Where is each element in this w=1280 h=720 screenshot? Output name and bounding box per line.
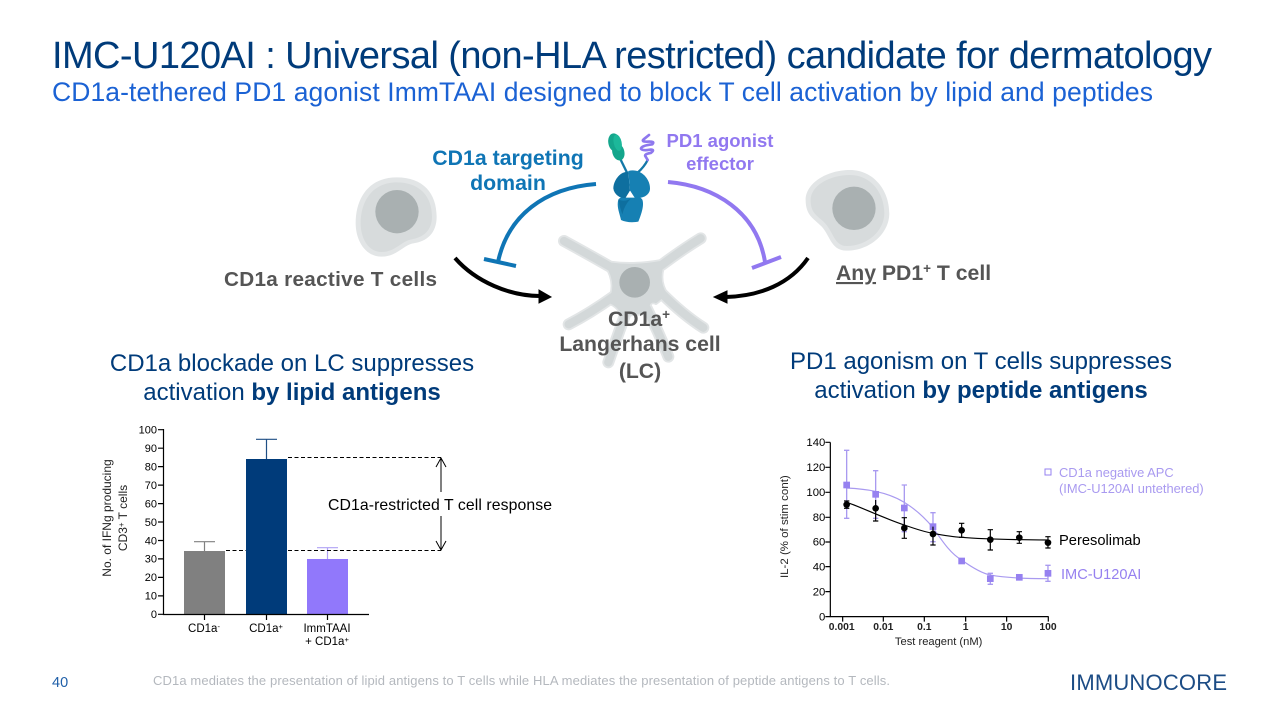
x labels: CD1a [249, 623, 279, 635]
legend: CD1a negative APC: (IMC-U120AI untethered) [1059, 481, 1204, 496]
label: CD1a+ Langerhans cell (LC): + [662, 307, 670, 322]
y tick labels: 60 [145, 498, 157, 510]
x labels [188, 622, 351, 648]
y tick labels: 50 [145, 517, 157, 529]
dashed reference lines [226, 458, 441, 550]
bar chart: IFNg producing T cells [100, 424, 552, 648]
x tick labels: 0.001 [829, 622, 855, 633]
y tick labels: 40 [813, 561, 825, 573]
heading: lipid antigens: CD1a blockade on LC suppresses [110, 350, 474, 377]
x labels: CD1a [188, 623, 217, 635]
y tick labels [806, 437, 825, 623]
title: IMC-U120AI : Universal (non-HLA restricted) candidate for dermatology [52, 35, 1212, 77]
legend: CD1a negative APC [1045, 465, 1204, 496]
y axis title: No. of IFNg producing [100, 459, 114, 577]
label: Any PD1+ T cell: Any PD1 [836, 262, 923, 285]
y tick labels: 30 [145, 554, 157, 566]
y axis title: + [117, 522, 126, 527]
page number: 40 [52, 675, 68, 691]
logo: Immunocore: IMMUNOCORE [1070, 670, 1227, 695]
x labels: + [279, 622, 284, 631]
x labels: ImmTAAI [303, 623, 351, 635]
subtitle: CD1a-tethered PD1 agonist ImmTAAI designed to block T cell activation by lipid and peptides [52, 77, 1153, 107]
icon: PD1 positive T cell [806, 170, 889, 251]
y tick labels: 40 [145, 535, 157, 547]
y tick labels: 20 [145, 572, 157, 584]
inhibition line: PD1 agonist [668, 182, 781, 268]
footnote: CD1a mediates the presentation of lipid antigens to T cells while HLA mediates the presentation of peptide antigens to T cells. [153, 673, 890, 688]
error bars [194, 439, 338, 559]
y tick labels: 80 [813, 512, 825, 524]
panel: mechanism diagram [224, 130, 991, 383]
legend: IMC-U120AI: IMC-U120AI [1061, 567, 1141, 583]
legend: CD1a negative APC: CD1a negative APC [1059, 465, 1174, 480]
y axis title: T cells [116, 485, 130, 522]
y tick labels: 70 [145, 480, 157, 492]
x labels: + CD1a [305, 635, 349, 648]
label: PD1 agonist effector: PD1 agonist [667, 130, 773, 151]
y tick labels: 0 [151, 609, 157, 621]
label: CD1a+ Langerhans cell (LC): CD1a [608, 307, 670, 331]
y axis title: CD3 [116, 485, 130, 551]
x tick labels: 1 [963, 622, 969, 633]
line chart: IL-2 dose response: IL-2 (% of stim cont) [779, 475, 791, 578]
x tick labels: 0.01 [873, 622, 894, 633]
heading: peptide antigens: activation by peptide antigens [814, 377, 1148, 404]
heading: peptide antigens: PD1 agonism on T cells suppresses [790, 348, 1172, 375]
label: CD1a+ Langerhans cell (LC): Langerhans cell [559, 333, 721, 356]
arrow: PD1 T cell to LC [714, 258, 808, 303]
series: IMC-U120AI [843, 450, 1051, 584]
y tick labels: 120 [806, 462, 825, 474]
x tick labels [829, 622, 1057, 633]
label: CD1a targeting domain: domain [470, 171, 546, 195]
arrow: reactive T cell to LC [455, 258, 551, 303]
callout: T cell response: CD1a-restricted T cell response [328, 497, 552, 514]
y tick labels: 0 [819, 611, 825, 623]
label: Any PD1+ T cell: T cell [931, 262, 991, 285]
icon: Langerhans cell [564, 238, 703, 362]
x labels: - [217, 622, 220, 631]
legend: Peresolimab: Peresolimab [1059, 533, 1141, 549]
icon: CD1a reactive T cell [356, 177, 437, 257]
x tick labels: 0.1 [917, 622, 932, 633]
label: CD1a reactive T cells: CD1a reactive T cells [224, 268, 437, 291]
axis titles: Test reagent (nM) [895, 636, 983, 648]
y tick labels: 140 [806, 437, 825, 449]
y tick labels [139, 424, 157, 621]
y tick labels: 60 [813, 537, 825, 549]
axes [158, 429, 369, 620]
x tick labels: 10 [1001, 622, 1013, 633]
y tick labels: 10 [145, 591, 157, 603]
line chart: IL-2 dose response [779, 437, 1057, 648]
axes [825, 442, 1049, 622]
bracket arrow [436, 458, 446, 550]
y tick labels: 80 [145, 461, 157, 473]
label: CD1a targeting domain: CD1a targeting [432, 146, 584, 170]
x tick labels: 100 [1039, 622, 1057, 633]
y tick labels: 20 [813, 586, 825, 598]
y tick labels: 90 [145, 443, 157, 455]
inhibition line: CD1a targeting [484, 184, 596, 266]
label: PD1 agonist effector: effector [686, 153, 754, 174]
icon: ImmTAAI molecule [607, 132, 653, 222]
label: CD1a+ Langerhans cell (LC): (LC) [619, 360, 661, 383]
x labels: + [344, 635, 349, 644]
bars [184, 459, 348, 614]
y tick labels: 100 [806, 487, 825, 499]
heading: lipid antigens: activation by lipid antigens [143, 379, 441, 406]
label: Any PD1+ T cell: + [923, 261, 931, 276]
series: Peresolimab [843, 500, 1051, 550]
y tick labels: 100 [139, 424, 157, 436]
